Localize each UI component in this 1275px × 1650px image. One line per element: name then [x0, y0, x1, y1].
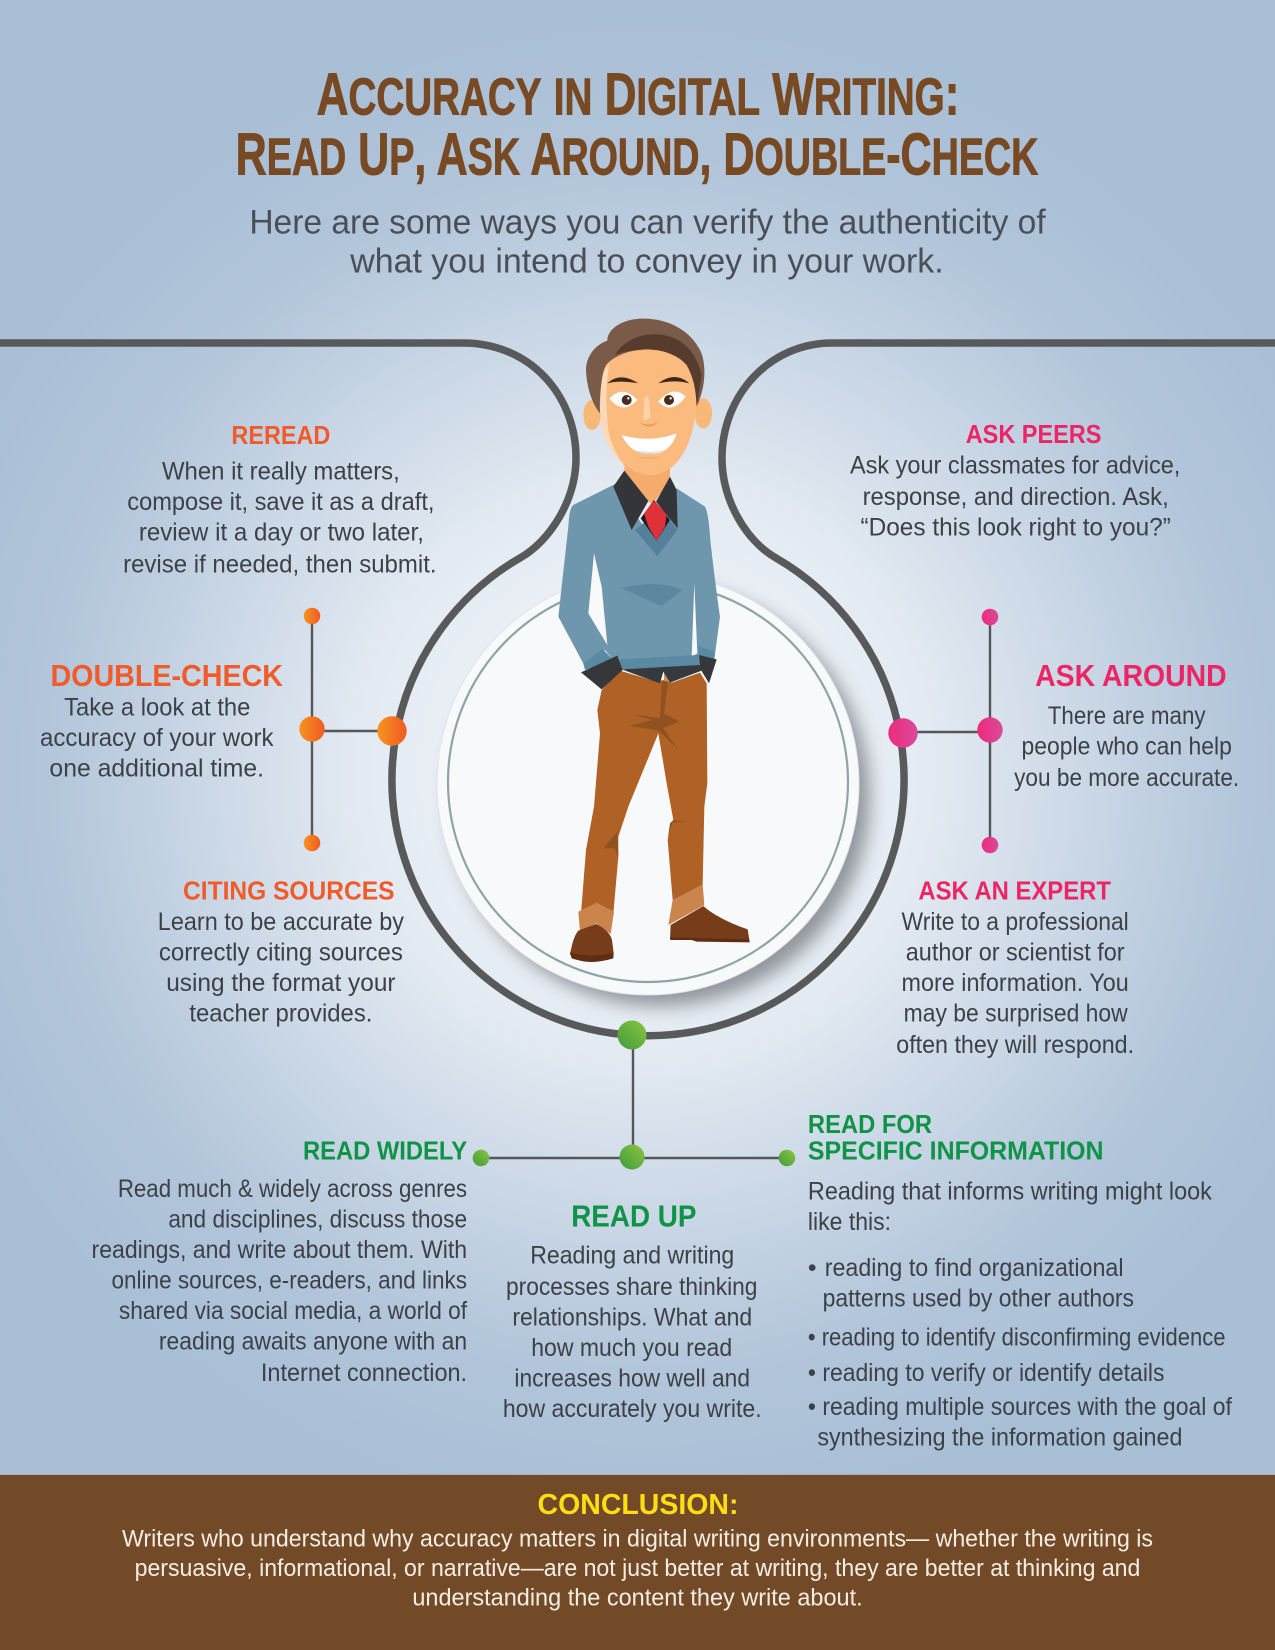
section: ask an expert: Write to a professional — [902, 909, 1129, 936]
section: read widely: Internet connection. — [261, 1360, 467, 1387]
section: read up: how much you read — [531, 1335, 732, 1362]
section: read up: READ UP — [571, 1200, 696, 1234]
section: citing sources: teacher provides. — [189, 1000, 372, 1027]
section: read for specific information: Reading that informs writing might look — [808, 1178, 1212, 1205]
section: read for specific information: reading to find organizational — [825, 1255, 1124, 1282]
section: ask peers: response, and direction. Ask, — [863, 484, 1169, 511]
section: ask peers: “Does this look right to you?” — [861, 514, 1171, 541]
section: ask around: people who can help — [1021, 733, 1232, 760]
section: read for specific information: • reading to verify or identify details — [808, 1360, 1165, 1387]
section: read up: Reading and writing — [530, 1242, 734, 1269]
section: reread — [123, 420, 437, 578]
section: citing sources — [158, 875, 405, 1027]
section: ask around: you be more accurate. — [1014, 765, 1239, 792]
section: reread: revise if needed, then submit. — [123, 551, 437, 578]
section: ask peers: Ask your classmates for advice, — [850, 452, 1180, 479]
title: ACCURACY IN DIGITAL WRITING: — [317, 63, 959, 128]
section: double-check: accuracy of your work — [40, 725, 274, 752]
section: read for specific information: synthesizing the information gained — [817, 1424, 1182, 1451]
section: reread: REREAD — [231, 420, 330, 450]
section: double-check — [40, 659, 283, 782]
section: ask around: ASK AROUND — [1035, 659, 1227, 693]
central disc behind figure — [437, 573, 870, 1006]
section: citing sources: Learn to be accurate by — [158, 909, 405, 936]
section: ask around — [1014, 659, 1239, 792]
section: citing sources: using the format your — [166, 970, 396, 997]
outline frame: bulb-shaped line — [0, 343, 1275, 1036]
section: ask peers: ASK PEERS — [966, 419, 1101, 449]
section: ask an expert: often they will respond. — [896, 1032, 1134, 1059]
conclusion band — [0, 1475, 1275, 1650]
section: read widely: and disciplines, discuss those — [168, 1207, 467, 1234]
title — [236, 63, 1038, 188]
section: citing sources: CITING SOURCES — [183, 875, 394, 905]
section: double-check: DOUBLE-CHECK — [50, 659, 283, 693]
section: read for specific information: like this: — [808, 1209, 891, 1236]
node group: double-check (orange) — [299, 608, 407, 851]
section: read up: relationships. What and — [512, 1304, 752, 1331]
section: ask an expert: ASK AN EXPERT — [918, 875, 1111, 905]
section: read for specific information: patterns used by other authors — [823, 1286, 1134, 1313]
section: read for specific information: READ FOR — [808, 1109, 932, 1139]
title: READ UP, ASK AROUND, DOUBLE-CHECK — [236, 123, 1038, 188]
section: read for specific information: SPECIFIC INFORMATION — [808, 1135, 1104, 1165]
section: read up: how accurately you write. — [503, 1396, 762, 1423]
section: reread: When it really matters, — [162, 459, 400, 486]
section: read for specific information: • reading multiple sources with the goal of — [808, 1394, 1232, 1421]
section: read up: processes share thinking — [506, 1274, 757, 1301]
conclusion band: CONCLUSION: — [538, 1489, 738, 1521]
section: ask an expert — [896, 875, 1134, 1059]
section: read for specific information: • — [808, 1255, 817, 1282]
section: read up: increases how well and — [514, 1366, 750, 1393]
section: read widely: READ WIDELY — [303, 1135, 467, 1165]
subtitle — [249, 204, 1046, 280]
cuffs and shirt hem — [581, 656, 623, 689]
section: ask an expert: more information. You — [902, 970, 1129, 997]
smile — [622, 433, 677, 454]
section: citing sources: correctly citing sources — [159, 939, 403, 966]
section: ask around: There are many — [1048, 703, 1206, 730]
section: read widely — [92, 1135, 467, 1387]
section: read for specific information — [808, 1109, 1232, 1451]
section: read widely: shared via social media, a world of — [119, 1298, 467, 1325]
figure upper body and head — [558, 319, 720, 689]
section: reread: compose it, save it as a draft, — [127, 489, 434, 516]
section: double-check: Take a look at the — [64, 694, 250, 721]
subtitle: Here are some ways you can verify the authenticity of — [249, 204, 1046, 242]
section: read widely: readings, and write about them. With — [92, 1237, 467, 1264]
character figure — [558, 319, 750, 962]
hair — [586, 319, 704, 413]
section: ask an expert: author or scientist for — [906, 939, 1125, 966]
eyes — [609, 392, 637, 407]
section: ask an expert: may be surprised how — [904, 1000, 1128, 1027]
conclusion band: understanding the content they write about. — [412, 1584, 863, 1611]
conclusion band: Writers who understand why accuracy matters in digital writing environments— whether the writing is — [122, 1525, 1153, 1552]
section: read widely: Read much & widely across genres — [118, 1176, 467, 1203]
section: read up — [503, 1200, 762, 1423]
node group: ask around (pink) — [888, 609, 1003, 853]
node group: read up (green) — [473, 1020, 795, 1170]
face — [600, 349, 697, 475]
section: read widely: reading awaits anyone with an — [159, 1329, 467, 1356]
section: read for specific information: • reading to identify disconfirming evidence — [808, 1324, 1226, 1351]
section: read widely: online sources, e-readers, and links — [112, 1268, 467, 1295]
figure lower body: trousers and shoes — [570, 671, 750, 962]
subtitle: what you intend to convey in your work. — [349, 242, 944, 280]
section: ask peers — [850, 419, 1180, 541]
section: double-check: one additional time. — [49, 755, 264, 782]
conclusion band: persuasive, informational, or narrative—are not just better at writing, they are better at thinking and — [135, 1555, 1140, 1582]
ears — [583, 400, 601, 430]
section: reread: review it a day or two later, — [139, 520, 424, 547]
